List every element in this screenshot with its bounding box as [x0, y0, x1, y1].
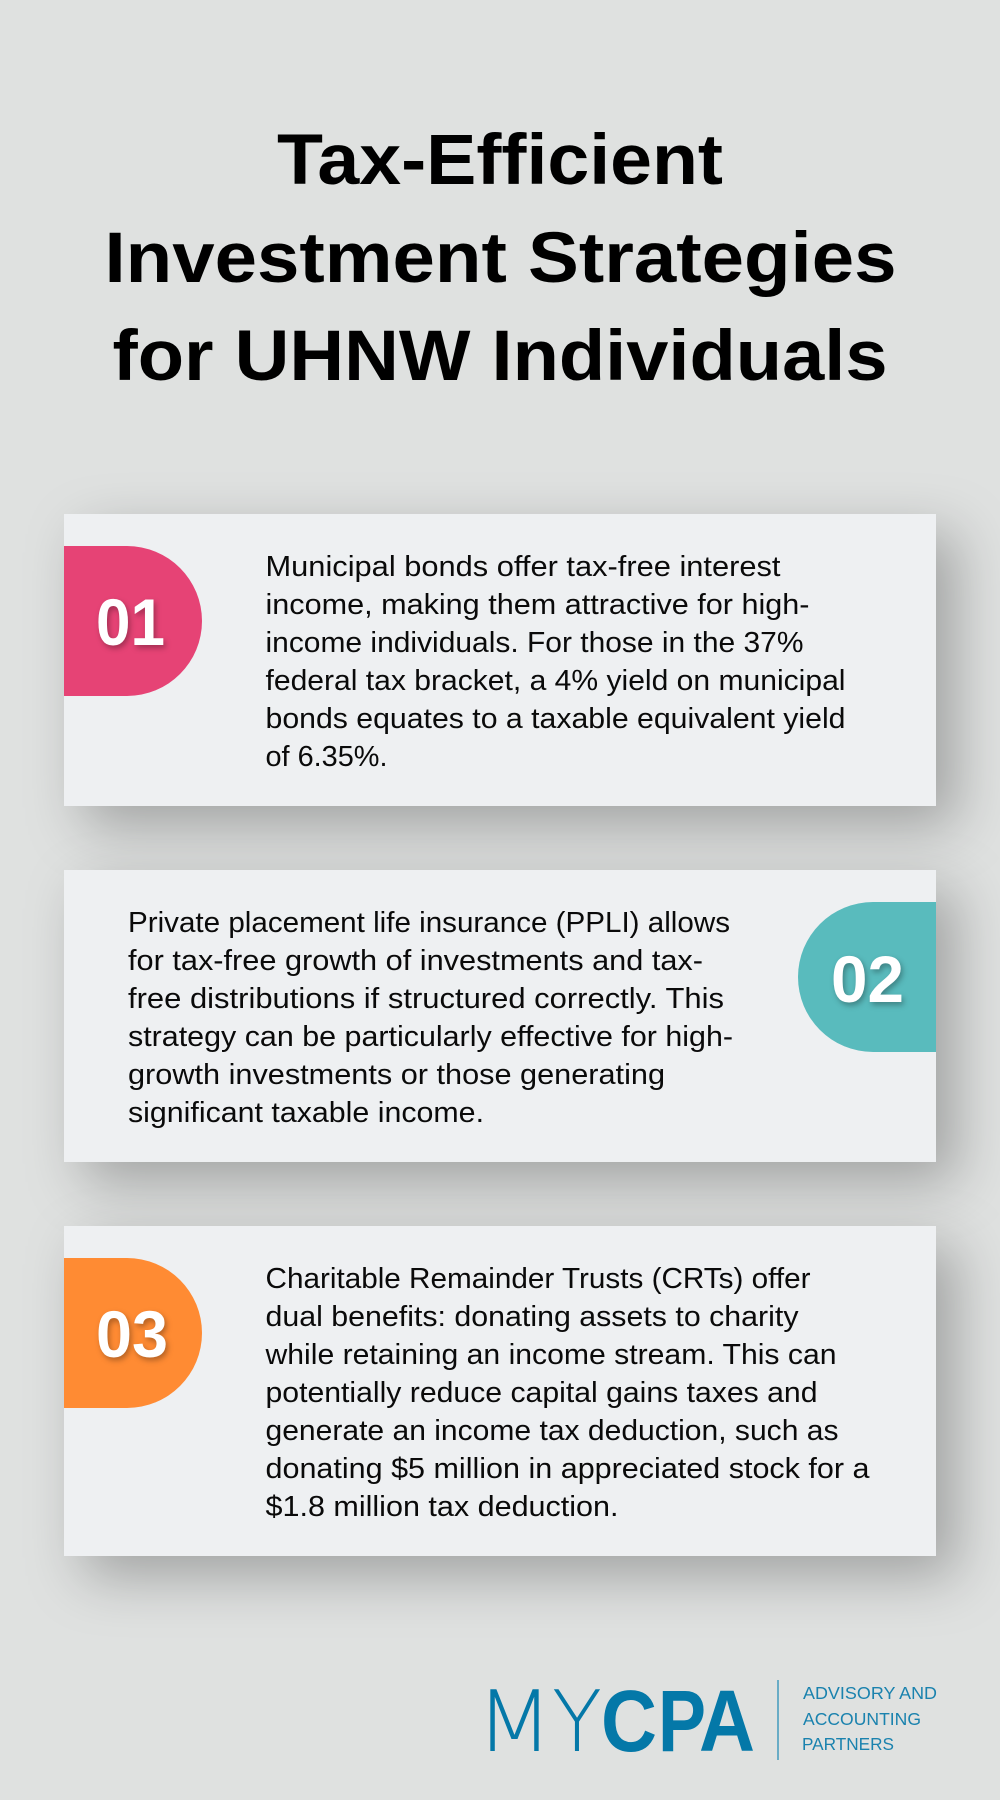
badge: 03: 03 [96, 1297, 168, 1371]
text: CRTs: $1.8 million tax deduction. [266, 1491, 618, 1523]
logo wordmark CPA [601, 1673, 755, 1770]
panel: strategy 03 charitable remainder trusts [64, 1226, 936, 1556]
text: municipal bonds: of 6.35%. [266, 741, 388, 773]
text: municipal bonds: income, making them attractive for high- [266, 589, 810, 621]
logo wordmark CPA: A [699, 1673, 755, 1770]
logo wordmark CPA: C [601, 1673, 657, 1770]
badge: 02: 02 [831, 942, 904, 1016]
text: municipal bonds: Municipal bonds offer tax-free interest [266, 551, 781, 583]
text: CRTs: donating $5 million in appreciated stock for a [266, 1453, 870, 1485]
logo tagline: ADVISORY AND [803, 1683, 937, 1703]
logo tagline [802, 1683, 937, 1754]
logo wordmark CPA: P [658, 1673, 706, 1770]
title: for UHNW Individuals [112, 317, 888, 396]
text: CRTs: while retaining an income stream. This can [264, 1339, 837, 1371]
text: municipal bonds: federal tax bracket, a 4% yield on municipal [266, 665, 846, 697]
text: CRTs: dual benefits: donating assets to charity [266, 1301, 799, 1333]
panel: strategy 02 PPLI [64, 870, 936, 1162]
text: PPLI: Private placement life insurance (PPLI) allows [128, 907, 730, 939]
badge: 01: 01 [96, 585, 165, 659]
text: CRTs [264, 1263, 870, 1523]
text: municipal bonds [266, 551, 846, 773]
panel: strategy 01 municipal bonds [64, 514, 936, 806]
text: municipal bonds: bonds equates to a taxable equivalent yield [266, 703, 846, 735]
logo wordmark MY: Y [552, 1673, 602, 1772]
text: CRTs: potentially reduce capital gains taxes and [266, 1377, 818, 1409]
logo wordmark MY [476, 1673, 602, 1772]
text: CRTs: Charitable Remainder Trusts (CRTs) offer [266, 1263, 811, 1295]
text: PPLI: free distributions if structured correctly. This [128, 983, 724, 1015]
title: Investment Strategies [104, 219, 897, 298]
logo tagline: PARTNERS [802, 1734, 894, 1754]
badge: 01 [64, 546, 202, 696]
title: Tax-Efficient [277, 121, 723, 200]
text: PPLI [128, 907, 733, 1129]
logo: MYCPA [476, 1673, 937, 1772]
badge: 03 [64, 1258, 202, 1408]
logo tagline: ACCOUNTING [803, 1709, 921, 1729]
text: PPLI: significant taxable income. [128, 1097, 484, 1129]
text: PPLI: growth investments or those generating [128, 1059, 665, 1091]
text: municipal bonds: income individuals. For those in the 37% [266, 627, 804, 659]
text: PPLI: strategy can be particularly effective for high- [128, 1021, 733, 1053]
title [104, 121, 897, 396]
logo wordmark MY: M [476, 1673, 553, 1772]
text: PPLI: for tax-free growth of investments and tax- [128, 945, 703, 977]
badge: 02 [798, 902, 936, 1052]
text: CRTs: generate an income tax deduction, such as [266, 1415, 838, 1447]
